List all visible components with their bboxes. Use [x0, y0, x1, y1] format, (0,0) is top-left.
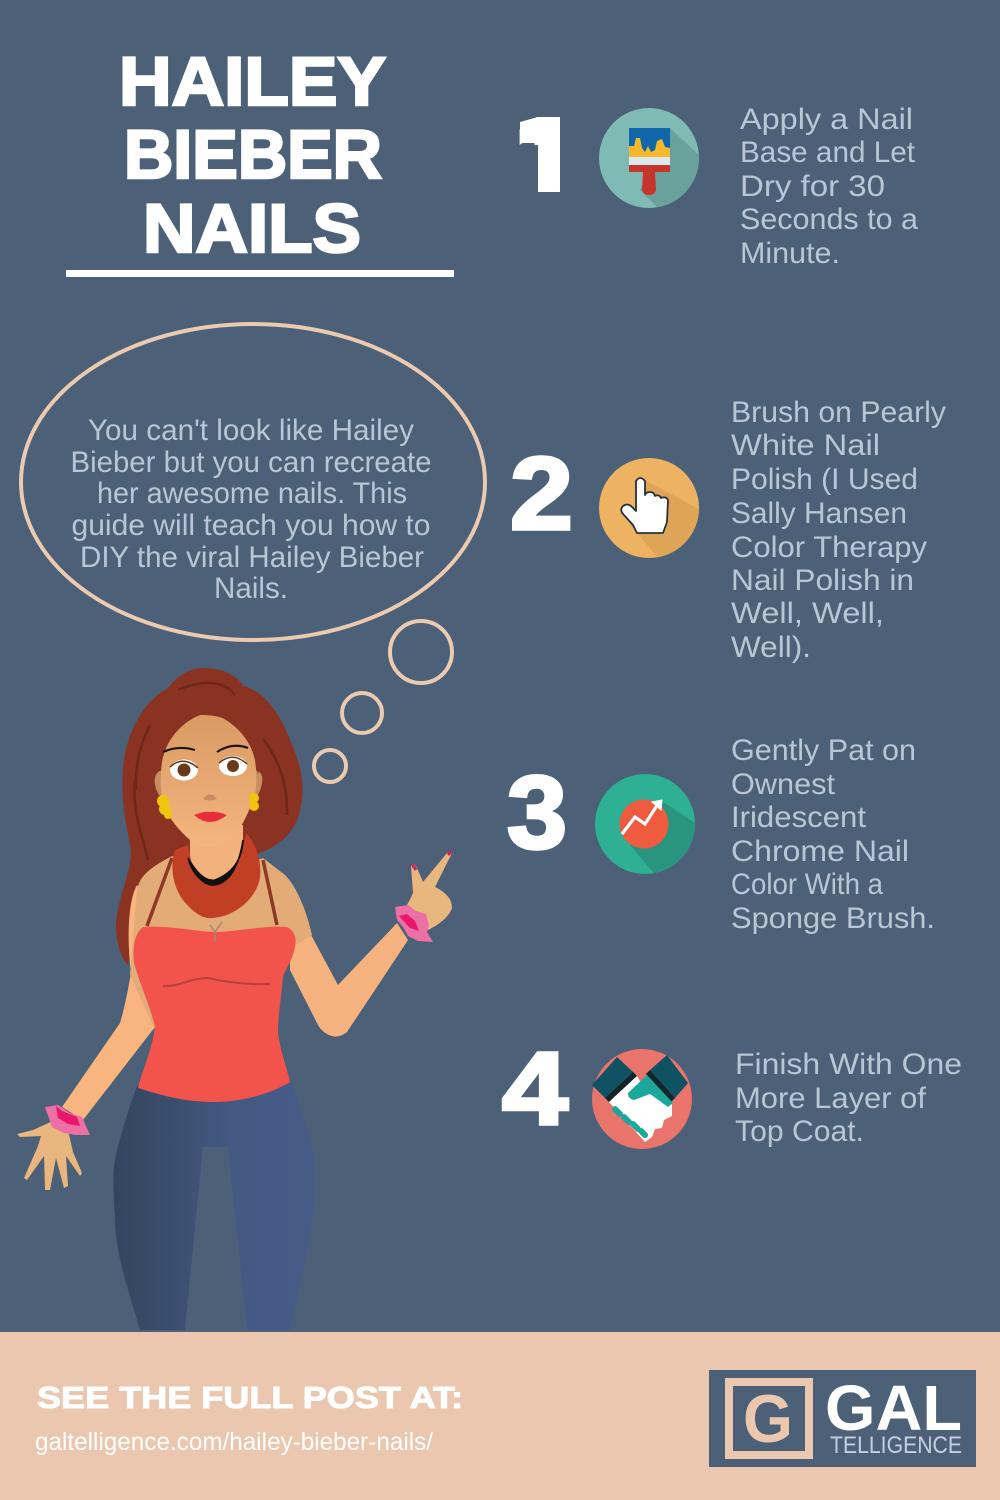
step 4 text: [735, 1048, 962, 1148]
step 1 text: Seconds to a: [740, 203, 918, 236]
step 1 text: Minute.: [740, 237, 840, 270]
thought bubble: [21, 324, 485, 782]
ears: [155, 770, 262, 800]
step 1 text: Apply a Nail: [740, 103, 913, 136]
intro text: her awesome nails. This: [97, 477, 407, 510]
right scrunchie: [395, 905, 433, 942]
step 1 text: Base and Let: [740, 136, 916, 169]
icon: pointing hand: [599, 458, 704, 560]
step 2 text: [731, 396, 946, 664]
step 4 number: 4: [502, 1031, 568, 1146]
footer heading: SEE THE FULL POST AT:: [37, 1380, 463, 1415]
intro text: You can't look like Hailey: [88, 414, 414, 447]
logo: TELLIGENCE: [830, 1432, 962, 1459]
logo: [709, 1370, 976, 1467]
open hand: [17, 1120, 82, 1190]
icon: handshake: [592, 1049, 692, 1149]
step 3 text: Color With a: [731, 868, 883, 901]
red top: [133, 927, 296, 1102]
necklace shadow: [188, 840, 243, 885]
step 3 text: [731, 734, 935, 935]
step 4 text: More Layer of: [735, 1082, 927, 1115]
step 2 number: 2: [510, 436, 573, 551]
straps: [147, 858, 277, 926]
footer band: [0, 1332, 1000, 1500]
step 3 text: Ownest: [731, 768, 836, 801]
step 2 text: Sally Hansen: [731, 497, 907, 530]
intro text: DIY the viral Hailey Bieber: [80, 541, 424, 574]
right arm: [290, 900, 408, 1037]
step 2 text: Polish (I Used: [731, 463, 918, 496]
step 3 number: 3: [507, 755, 567, 870]
left arm: [62, 885, 165, 1120]
intro text: Nails.: [214, 572, 288, 605]
chest and shoulders: [130, 856, 312, 1030]
pointing hand: [400, 853, 452, 930]
step 3 text: Sponge Brush.: [731, 902, 935, 935]
step 2 text: White Nail: [731, 429, 880, 462]
step 1 text: [740, 103, 918, 270]
icon: growth chart: [595, 774, 695, 874]
face: [161, 715, 256, 847]
logo: GAL: [825, 1372, 962, 1444]
intro text: [70, 414, 432, 605]
intro text: Bieber but you can recreate: [70, 446, 432, 479]
nose: [203, 794, 217, 800]
step 2 text: Well, Well,: [731, 597, 884, 630]
hair fringe: [158, 698, 264, 775]
title: BIEBER: [124, 116, 382, 193]
footer url: galtelligence.com/hailey-bieber-nails/: [35, 1428, 433, 1456]
jeans: [114, 1083, 315, 1330]
logo: G: [743, 1381, 793, 1457]
intro text: guide will teach you how to: [72, 509, 430, 542]
step 4 text: Top Coat.: [735, 1115, 864, 1148]
step 3 text: Iridescent: [731, 801, 867, 834]
step 1 number: 1: [515, 97, 565, 212]
step 4 text: Finish With One: [735, 1048, 962, 1081]
step 2 text: Color Therapy: [731, 531, 927, 564]
title: [66, 43, 454, 277]
step 3 text: Gently Pat on: [731, 734, 916, 767]
illustration: woman: [17, 668, 452, 1330]
hair: [116, 668, 303, 965]
step 3 text: Chrome Nail: [731, 835, 909, 868]
lips: [194, 812, 227, 822]
earrings: [157, 793, 259, 819]
step 2 text: Brush on Pearly: [731, 396, 946, 429]
title: HAILEY: [119, 43, 386, 120]
neck: [190, 825, 243, 885]
eyes and brows: [163, 746, 248, 780]
step 1 text: Dry for 30: [740, 170, 885, 203]
step 2 text: Nail Polish in: [731, 564, 914, 597]
step 2 text: Well).: [731, 631, 811, 664]
title: NAILS: [143, 190, 361, 267]
scarf: [172, 833, 260, 918]
icon: paint brush: [599, 108, 704, 210]
left scrunchie: [45, 1105, 90, 1135]
